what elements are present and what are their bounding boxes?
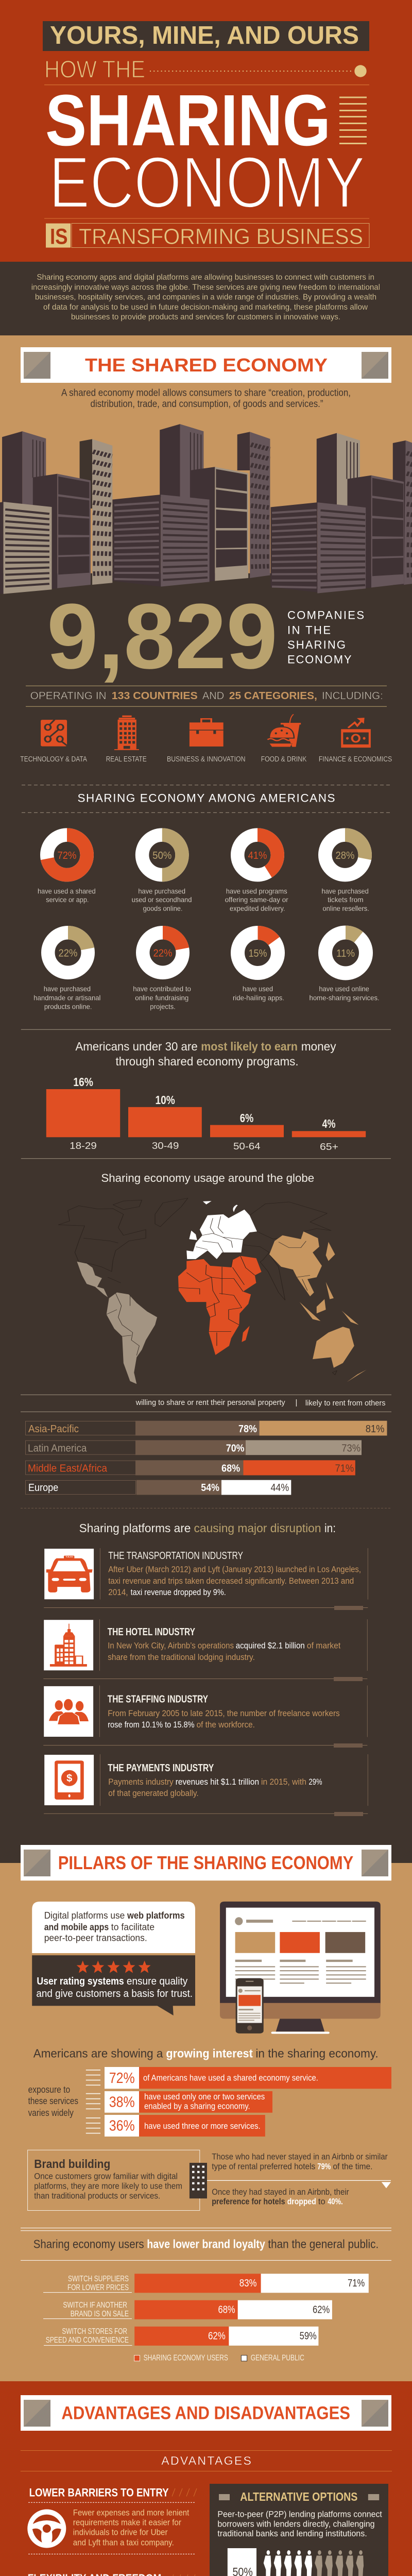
donut captions row one: have used a shared [38, 887, 96, 895]
industry: payments: of that generated globally. [108, 1788, 199, 1798]
bar chart: earning by age: 65+ [320, 1141, 338, 1152]
panel: header background [0, 0, 412, 262]
hotel preference text: 79% [317, 2162, 331, 2172]
map: europe [186, 1201, 257, 1259]
industry: payments [44, 1754, 368, 1816]
row: switch suppliers: SWITCH SUPPLIERS [68, 2275, 129, 2283]
industry: payments: $ [66, 1773, 72, 1784]
donut captions row one: have used programs [226, 887, 287, 895]
icon: people group [49, 1699, 89, 1724]
industry: hotel: THE HOTEL INDUSTRY [108, 1626, 196, 1638]
subtitle: is transforming business: IS [50, 225, 68, 249]
speech bubble: user ratings: User rating systems [37, 1976, 124, 1987]
map: latin america [77, 1262, 157, 1384]
hotel preference text: 40%. [328, 2196, 343, 2206]
row: switch suppliers: 83% [239, 2278, 257, 2289]
intro text: businesses, hospitality services, and companies in a wide range of industries. By providing a wealth [35, 293, 376, 302]
donut captions row one [38, 887, 369, 912]
stat: 9,829 companies: COMPANIES [287, 608, 364, 621]
section banner: pillars [21, 1845, 391, 1880]
category labels: REAL ESTATE [106, 755, 147, 764]
industry: payments: revenues hit $1.1 trillion [176, 1777, 259, 1787]
row: middle east and africa: 71% [335, 1463, 354, 1474]
table legend: willing to share or rent their personal property [135, 1398, 285, 1407]
speech bubble: user ratings [32, 1955, 195, 2015]
donut: 15%: 15% [248, 948, 267, 959]
exposure statistics [28, 2067, 391, 2137]
donut captions row one: expedited delivery. [230, 904, 285, 912]
regional table [21, 1395, 391, 1495]
bar chart: earning by age: 50-64 [233, 1141, 261, 1151]
heading: under 30: money [301, 1040, 336, 1053]
header title block [43, 21, 369, 249]
industry: transportation: taxi revenue dropped by 9%. [131, 1587, 226, 1597]
icon: taxi [46, 1555, 93, 1592]
donut: 22% fundraising: 22% [153, 948, 173, 959]
industry: staffing: of the workforce. [197, 1720, 255, 1730]
industry: staffing: rose from 10.1% to 15.8% [108, 1720, 195, 1730]
section banner: the shared economy [21, 347, 391, 383]
donut captions row one: have purchased [321, 887, 369, 895]
donut: 41% [237, 835, 278, 875]
donut: 72% [47, 835, 87, 875]
hotel preference text: Once they had stayed in an Airbnb, their [212, 2187, 349, 2197]
chart legend [134, 2354, 304, 2363]
row: another brand on sale: BRAND IS ON SALE [71, 2310, 129, 2318]
donut captions row two: handmade or artisanal [33, 994, 100, 1002]
stat: 9,829 companies: IN THE [287, 623, 331, 636]
industry: hotel [43, 1619, 367, 1681]
panel: shared economy background [0, 335, 412, 578]
industry: staffing: From February 2005 to late 2015, the number of freelance workers [108, 1708, 340, 1718]
heading: sharing economy among americans: SHARING ECONOMY AMONG AMERICANS [77, 792, 335, 805]
row: asia-pacific: Asia-Pacific [28, 1423, 79, 1435]
exposure label: varies widely [28, 2108, 74, 2118]
donut captions row two: online fundraising [135, 994, 188, 1002]
section banner: advantages and disadvantages: ADVANTAGES AND DISADVANTAGES [61, 2403, 350, 2424]
donut captions row two: have used [243, 985, 273, 993]
industry: payments: 29% [309, 1777, 322, 1787]
stat: 36% [86, 2115, 265, 2137]
speech bubble: digital platforms: web platforms [127, 1910, 185, 1921]
exposure label [28, 2084, 78, 2118]
world map [58, 1198, 367, 1384]
intro text: businesses to provide products and services for customers in innovative ways. [71, 313, 340, 321]
stat: 72%: 72% [109, 2070, 135, 2087]
heading: causing major disruption: causing major disruption [194, 1521, 321, 1535]
chart legend: GENERAL PUBLIC [251, 2354, 304, 2363]
panel: intro [0, 262, 412, 335]
panel: brand building [28, 2150, 391, 2210]
row: another brand on sale [43, 2300, 332, 2319]
bar chart: earning by age: 18-29 [70, 1140, 97, 1151]
donut: 28%: 28% [336, 850, 355, 861]
donut: 28% [325, 835, 365, 875]
donut captions row two: have purchased [44, 985, 91, 993]
icon: food and drink [267, 714, 301, 747]
hotel preference text: of the time. [333, 2162, 373, 2172]
heading: globe usage: Sharing economy usage around the globe [101, 1172, 314, 1184]
donut captions row two: projects. [150, 1002, 176, 1010]
operating in countries banner: INCLUDING: [322, 690, 383, 702]
phone [236, 1978, 264, 2033]
operating in countries banner: AND [202, 690, 224, 702]
category labels [20, 755, 392, 764]
operating in countries banner [26, 686, 387, 706]
intro text: Sharing economy apps and digital platforms are allowing businesses to connect with customers in [37, 273, 374, 282]
icon: technology [41, 720, 67, 747]
industry: hotel: acquired $2.1 billion [236, 1641, 305, 1651]
hotel preference text: dropped [287, 2196, 316, 2206]
chart legend: SHARING ECONOMY USERS [144, 2354, 228, 2363]
industry: transportation [44, 1548, 368, 1610]
panel: brand building: platforms, they are more likely to use them [34, 2181, 182, 2191]
exposure label: these services [28, 2096, 78, 2106]
stat: 38%: enabled by a sharing economy. [144, 2101, 250, 2111]
icon: hotel tower [50, 1624, 87, 1667]
row: middle east and africa: 68% [221, 1463, 240, 1474]
donut captions row two [33, 985, 380, 1010]
donut captions row two: ride-hailing apps. [233, 994, 284, 1002]
donut captions row one: used or secondhand [132, 895, 192, 904]
map outlines: unshaded regions [58, 1198, 337, 1375]
panel: brand building: Brand building [34, 2157, 110, 2171]
donut captions row two: have contributed to [133, 985, 191, 993]
icon: payment tablet [55, 1760, 84, 1800]
speech bubble: user ratings: and give customers a basis for trust. [36, 1988, 193, 1999]
donut: 72%: 72% [58, 850, 77, 861]
industry: staffing: THE STAFFING INDUSTRY [108, 1694, 209, 1705]
industry: payments: in 2015, with [261, 1777, 306, 1787]
panel: alternative options: ALTERNATIVE OPTIONS [240, 2490, 357, 2503]
hotel preference text: type of rental preferred hotels [212, 2162, 315, 2172]
stat: 36%: 36% [109, 2117, 135, 2134]
advantage: lower barriers to entry [27, 2486, 197, 2554]
row: speed and convenience: 62% [208, 2331, 226, 2342]
row: switch suppliers: 71% [348, 2278, 365, 2289]
advantage: lower barriers to entry: LOWER BARRIERS TO ENTRY [29, 2486, 169, 2499]
five star rating [77, 1961, 151, 1973]
advantage: lower barriers to entry: and Lyft than a taxi company. [73, 2537, 174, 2547]
hotel preference text: preference for hotels [212, 2196, 285, 2206]
operating in countries banner: 25 CATEGORIES, [229, 690, 317, 702]
bar chart: brand loyalty [43, 2274, 369, 2363]
heading: causing major disruption [21, 1508, 391, 1535]
row: another brand on sale: SWITCH IF ANOTHER [63, 2301, 127, 2310]
stat: 50% of investors [210, 2548, 380, 2576]
table legend [21, 1395, 391, 1412]
donut: 11%: 11% [336, 948, 355, 959]
shared economy definition [61, 388, 351, 410]
row: europe: 54% [201, 1482, 219, 1494]
donut captions row one: tickets from [328, 895, 364, 904]
intro text: of data for analysis to be used in future decision-making and marketing, these platforms allow [43, 303, 368, 312]
speech bubble: digital platforms [32, 1902, 195, 1953]
shared economy definition: A shared economy model allows consumers to share “creation, production, [61, 388, 351, 399]
donut: 50% [142, 835, 182, 875]
table legend: likely to rent from others [305, 1399, 385, 1408]
industry: transportation: TAXI [65, 1555, 73, 1558]
speech bubble: digital platforms: Digital platforms use [44, 1910, 125, 1921]
donut captions row two: products online. [44, 1002, 92, 1010]
operating in countries banner: 133 COUNTRIES [112, 690, 198, 702]
section banner: the shared economy: THE SHARED ECONOMY [85, 354, 328, 376]
heading: growing interest [33, 2046, 379, 2060]
bar chart: earning by age [21, 1075, 391, 1159]
donut captions row one: offering same-day or [225, 895, 288, 904]
bar chart: earning by age: 6% [240, 1111, 253, 1125]
donut captions row two: have used online [319, 985, 369, 993]
row: another brand on sale: 68% [218, 2304, 235, 2315]
category labels: BUSINESS & INNOVATION [167, 755, 245, 764]
industry: hotel: share from the traditional lodging industry. [108, 1652, 255, 1662]
illustration: city skyline [0, 424, 412, 600]
heading: causing major disruption: in: [324, 1521, 336, 1535]
donut: 11% [325, 933, 366, 973]
subtitle: is transforming business: TRANSFORMING BUSINESS [79, 225, 363, 249]
industry: hotel: In New York City, Airbnb’s operations [108, 1641, 234, 1651]
heading: growing interest: in the sharing economy. [255, 2046, 379, 2060]
heading: under 30: Americans under 30 are [75, 1040, 198, 1053]
heading: lower brand loyalty: than the general public. [268, 2237, 379, 2250]
shared economy definition: distribution, trade, and consumption, of goods and services.” [91, 399, 323, 410]
row: europe: Europe [28, 1482, 58, 1494]
title: sharing: SHARING [45, 79, 331, 161]
panel: brand building: than traditional products or services. [34, 2191, 160, 2201]
industry: hotel: of market [307, 1641, 340, 1651]
donut: 22% handmade [48, 933, 88, 973]
panel: advantages background [0, 2381, 412, 2576]
donut: 50%: 50% [152, 850, 171, 861]
panel: alternative options: Peer-to-peer (P2P) lending platforms connect [217, 2509, 382, 2519]
stat: 38% [86, 2091, 272, 2113]
row: latin america [26, 1440, 362, 1455]
hotel preference text [207, 2151, 391, 2206]
row: latin america: 73% [341, 1443, 360, 1454]
advantage: lower barriers to entry: individuals to drive for Uber [73, 2527, 168, 2537]
icon: hotel building [190, 2163, 207, 2198]
section banner: advantages and disadvantages [21, 2395, 391, 2431]
panel: dark statistics background [0, 598, 412, 1863]
stat: 36%: have used three or more services. [144, 2121, 261, 2131]
row: asia-pacific: 81% [366, 1423, 385, 1435]
bar chart: earning by age: 10% [156, 1093, 175, 1107]
panel: alternative options: borrowers with lenders directly, challenging [217, 2519, 375, 2529]
stat: 72%: of Americans have used a shared economy service. [143, 2073, 318, 2083]
donut captions row one: online resellers. [322, 904, 369, 912]
category labels: FOOD & DRINK [261, 755, 307, 764]
bar chart: earning by age: 16% [73, 1075, 93, 1089]
row: asia-pacific [26, 1421, 387, 1435]
heading: growing interest: growing interest [166, 2046, 253, 2060]
panel: brand building: Once customers grow familiar with digital [34, 2171, 178, 2181]
speech bubble: user ratings: ensure quality [127, 1976, 187, 1987]
hotel preference text: to [318, 2196, 325, 2206]
row: switch suppliers [43, 2274, 369, 2293]
stat: 9,829 companies: SHARING [287, 638, 346, 651]
row: europe [26, 1480, 291, 1495]
category icons [41, 714, 371, 750]
industry: payments: Payments industry [108, 1777, 174, 1787]
industry: transportation: 2014, [108, 1587, 128, 1597]
heading: lower brand loyalty: have lower brand loyalty [147, 2237, 265, 2250]
section banner: pillars: PILLARS OF THE SHARING ECONOMY [58, 1852, 353, 1873]
heading: under 30 [21, 1029, 391, 1068]
table legend: | [296, 1398, 297, 1407]
category labels: TECHNOLOGY & DATA [20, 755, 87, 764]
tagline bar: YOURS, MINE, AND OURS [50, 22, 359, 49]
heading: under 30: most likely to earn [201, 1040, 298, 1053]
how the line [44, 56, 369, 85]
industry: transportation: taxi revenue and trips taken decreased significantly. Between 2013 and [108, 1576, 354, 1586]
exposure label: exposure to [28, 2084, 70, 2095]
industry: transportation: After Uber (March 2012) and Lyft (January 2013) launched in Los Angeles, [108, 1565, 361, 1574]
intro text [31, 273, 380, 321]
row: asia-pacific: 78% [238, 1423, 257, 1435]
industry: payments: THE PAYMENTS INDUSTRY [108, 1762, 214, 1774]
donut captions row two: home-sharing services. [309, 994, 380, 1002]
row: speed and convenience [44, 2327, 318, 2346]
heading: lower brand loyalty: Sharing economy users [33, 2237, 144, 2250]
how the line: HOW THE [44, 56, 145, 82]
heading: causing major disruption: Sharing platforms are [79, 1521, 191, 1535]
row: middle east and africa [26, 1460, 355, 1476]
icon: briefcase [190, 719, 224, 747]
icon: finance [341, 718, 371, 748]
donut: 22% handmade: 22% [59, 948, 78, 959]
heading: advantages: ADVANTAGES [161, 2454, 251, 2467]
operating in countries banner: OPERATING IN [30, 690, 107, 702]
panel: pillars background [0, 1863, 412, 2381]
row: another brand on sale: 62% [313, 2304, 330, 2315]
donut: 15% [238, 933, 278, 973]
donut: 41%: 41% [248, 850, 267, 861]
stat: 38%: 38% [109, 2094, 135, 2111]
panel: alternative options: traditional banks and lending institutions. [217, 2529, 367, 2538]
map: asia pacific [269, 1231, 367, 1382]
speech bubble: digital platforms: peer-to-peer transactions. [44, 1933, 147, 1943]
heading: under 30: through shared economy programs. [115, 1055, 299, 1068]
panel: alternative options [210, 2484, 388, 2576]
intro text: increasingly innovative ways across the globe. These services are giving new freedom to international [31, 283, 380, 292]
row: europe: 44% [271, 1482, 289, 1494]
row: middle east and africa: Middle East/Africa [28, 1463, 108, 1474]
donut charts [33, 835, 380, 1010]
row: latin america: 70% [226, 1443, 245, 1454]
advantage: lower barriers to entry: requirements make it easier for [73, 2518, 181, 2528]
illustration: monitor and phone [220, 1902, 381, 2034]
row: speed and convenience: 59% [300, 2331, 317, 2342]
industry: transportation: THE TRANSPORTATION INDUSTRY [108, 1550, 243, 1562]
speech bubble: digital platforms: and mobile apps [44, 1922, 109, 1932]
row: switch suppliers: FOR LOWER PRICES [67, 2283, 129, 2292]
stat: 9,829 companies: 9,829 [47, 585, 278, 688]
advantage: lower barriers to entry: Fewer expenses and more lenient [73, 2507, 190, 2517]
donut captions row one: goods online. [143, 904, 183, 912]
row: speed and convenience: SWITCH STORES FOR [62, 2327, 127, 2336]
icon: steering wheel [27, 2509, 66, 2548]
speech bubble: digital platforms: to facilitate [111, 1922, 154, 1932]
heading: lower brand loyalty [21, 2228, 391, 2260]
bar chart: earning by age: 4% [322, 1117, 336, 1130]
row: latin america: Latin America [28, 1443, 87, 1454]
decorative stacked lines [339, 97, 367, 144]
hotel preference text: Those who had never stayed in an Airbnb or similar [212, 2151, 388, 2161]
donut: 22% fundraising [143, 933, 183, 973]
bar chart: earning by age: 30-49 [152, 1140, 179, 1151]
map: middle east and africa [178, 1256, 262, 1355]
stat: 9,829 companies: ECONOMY [287, 653, 352, 666]
donut captions row one: have purchased [138, 887, 185, 895]
icon: real estate building [114, 716, 139, 750]
donut captions row one: service or app. [46, 895, 89, 904]
investor silhouettes [264, 2550, 364, 2576]
category labels: FINANCE & ECONOMICS [319, 755, 392, 764]
heading: growing interest: Americans are showing a [33, 2046, 163, 2060]
industry: staffing [43, 1686, 367, 1748]
stat: 72% [86, 2067, 391, 2089]
stat: 38%: have used only one or two services [144, 2092, 265, 2102]
row: speed and convenience: SPEED AND CONVENIENCE [46, 2336, 129, 2345]
